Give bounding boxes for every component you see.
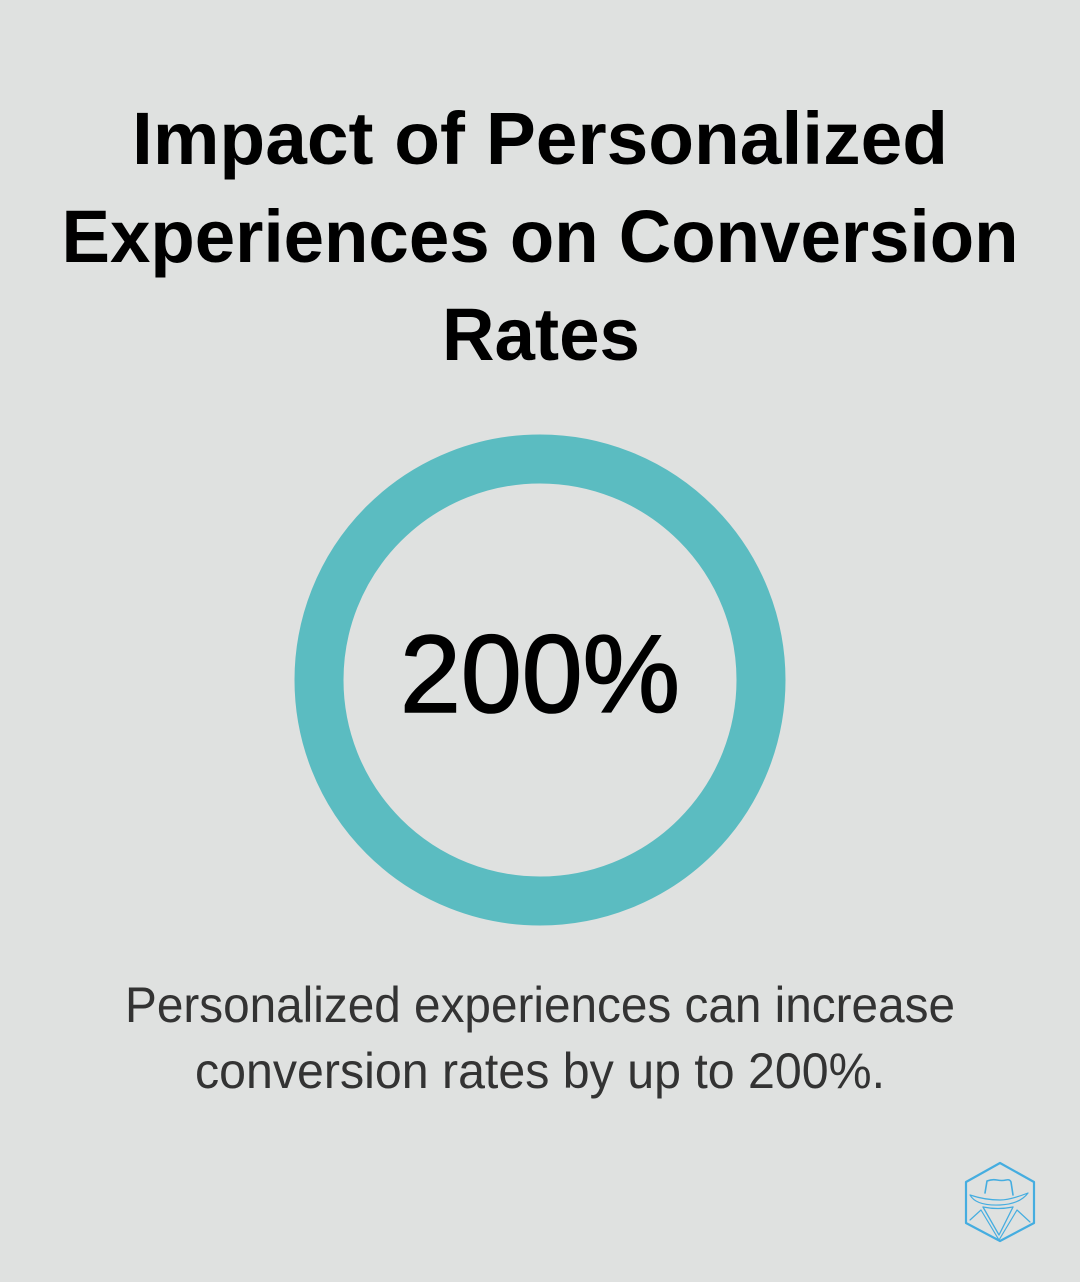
icon: hexagon spy logo	[966, 1163, 1034, 1241]
title: Rates	[442, 293, 640, 376]
description: Personalized experiences can increase	[125, 977, 955, 1033]
description	[125, 977, 955, 1099]
donut ring	[319, 459, 761, 901]
title: Experiences on Conversion	[62, 195, 1018, 278]
description: conversion rates by up to 200%.	[195, 1043, 885, 1099]
title: Impact of Personalized	[132, 97, 948, 180]
value: 200%: 200%	[400, 613, 680, 736]
title	[62, 97, 1018, 376]
